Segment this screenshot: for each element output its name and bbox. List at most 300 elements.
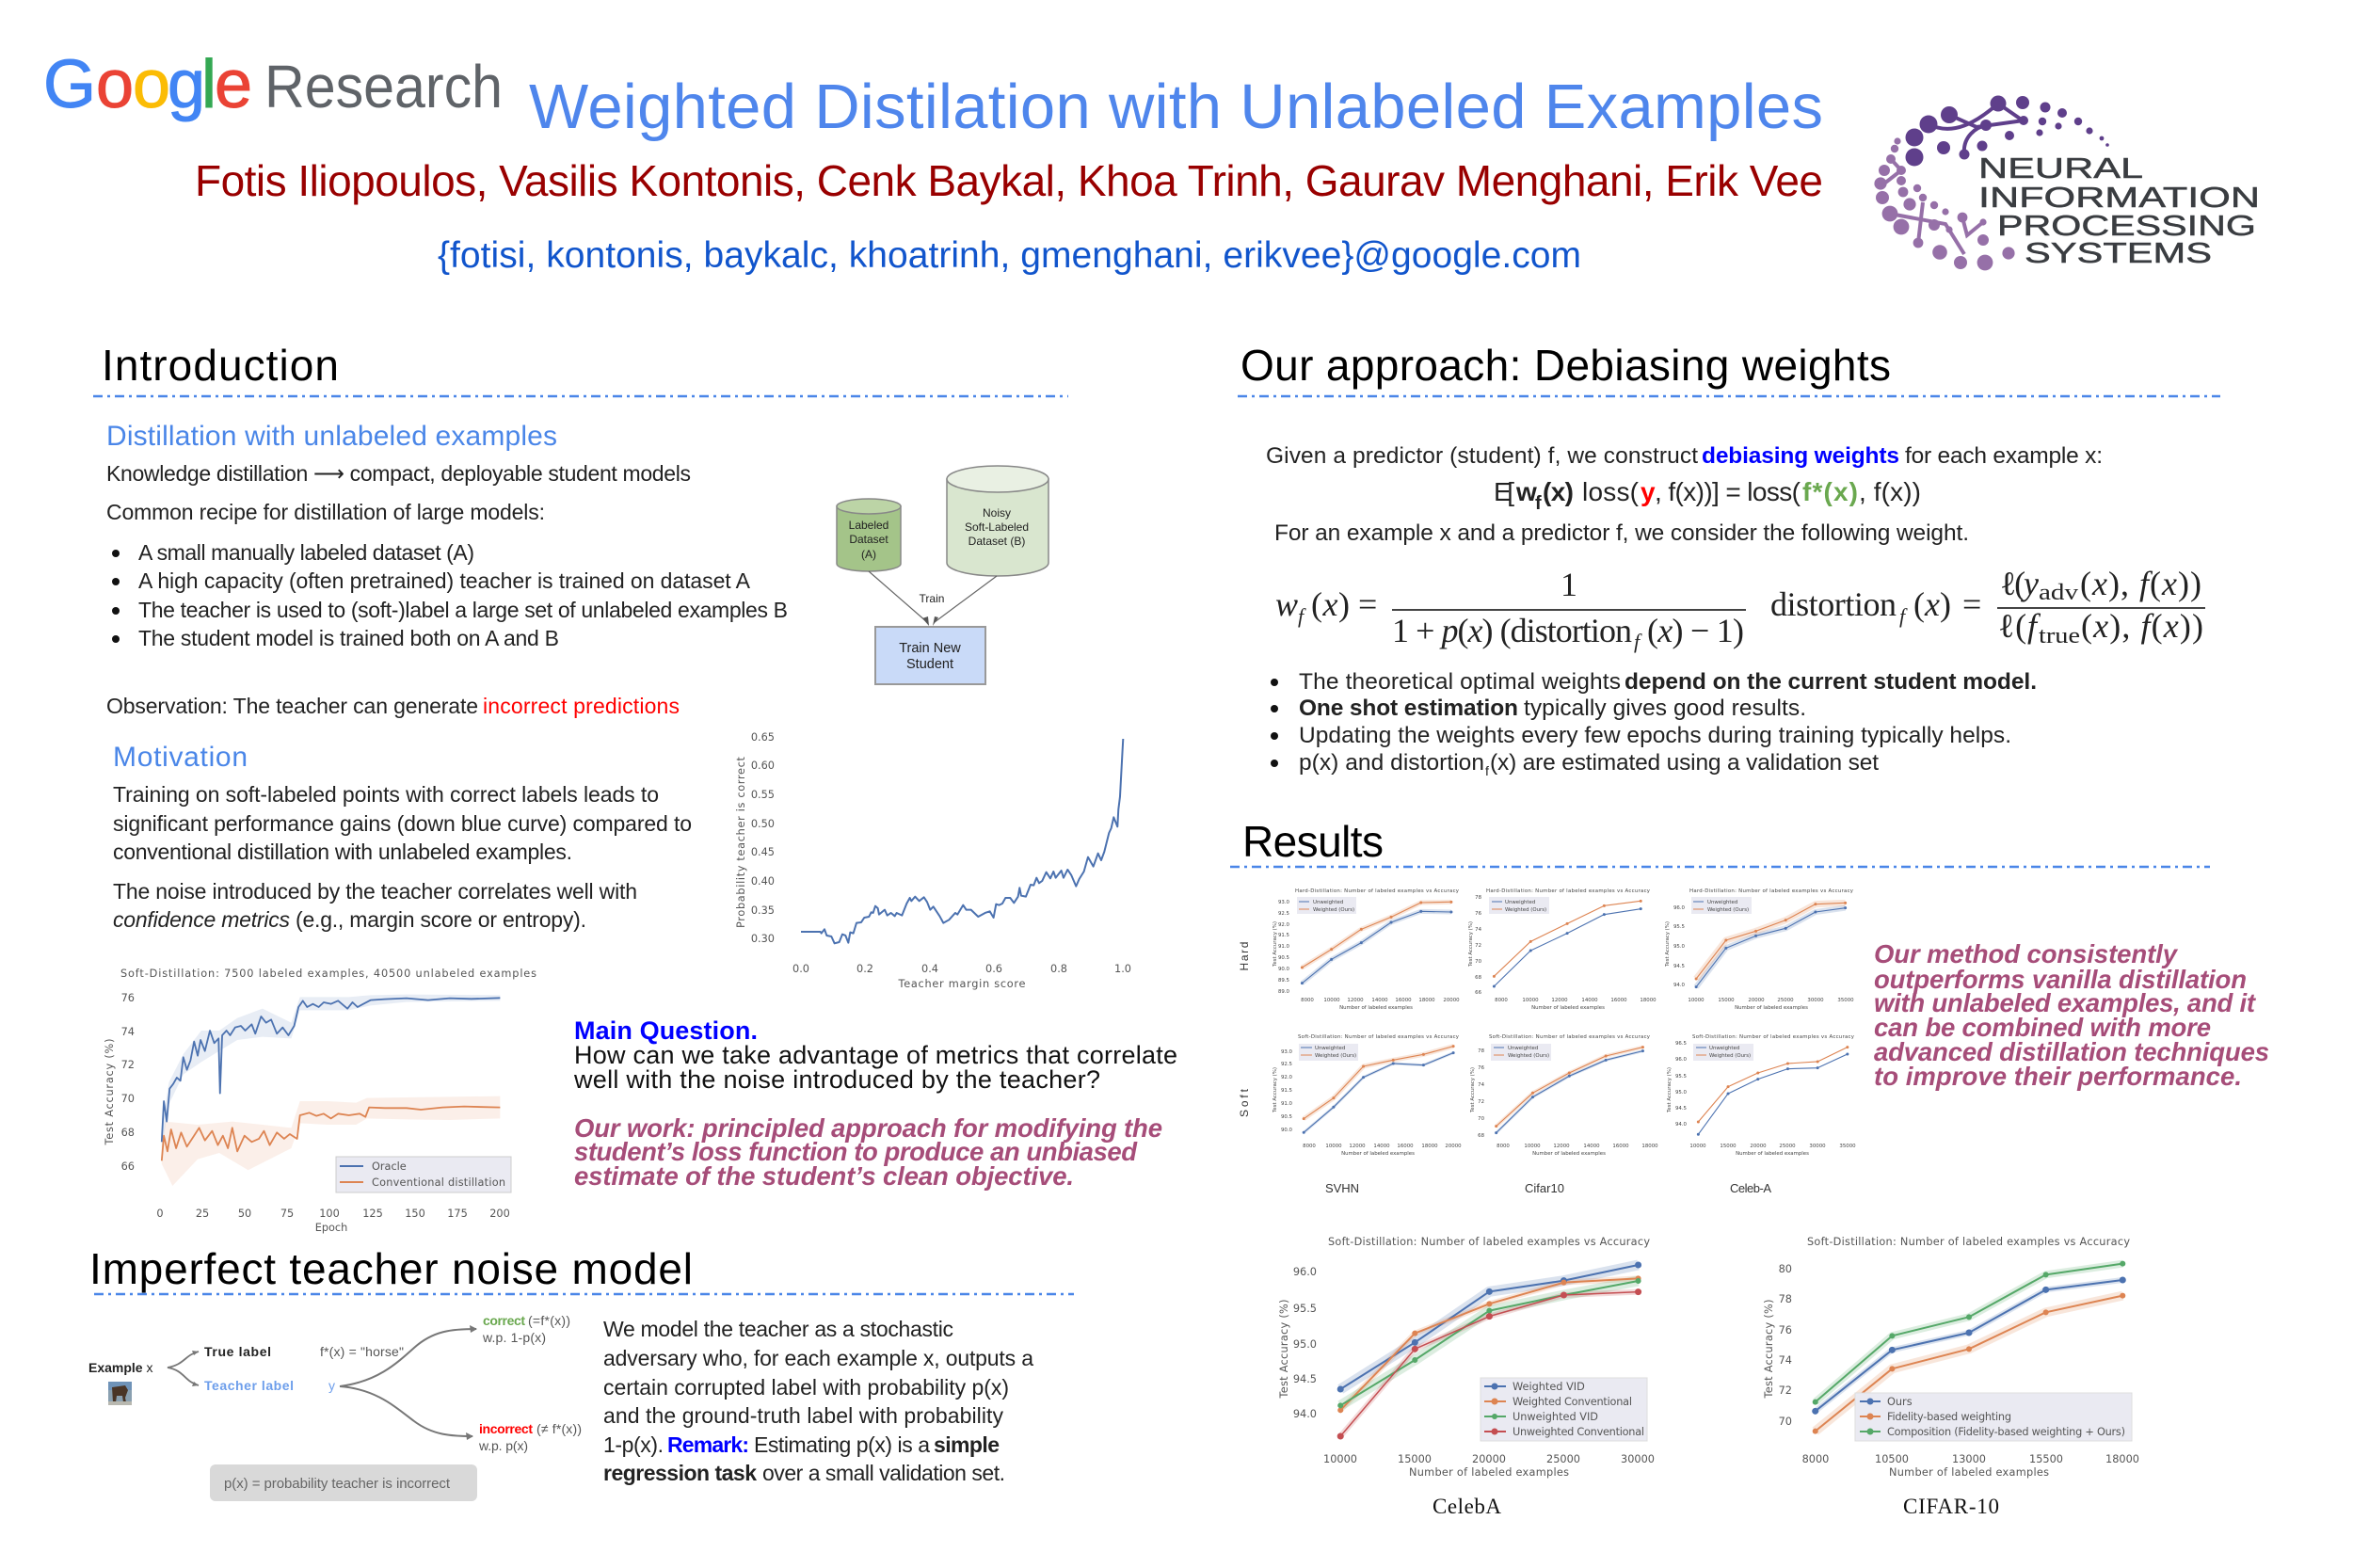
chart: soft distillation SVHN: 16000 (1397, 1144, 1414, 1149)
equation: expected weighted loss: f*(x) (1802, 477, 1858, 506)
equation: distortion formula: = (1962, 585, 1981, 623)
text: motivation body (113, 782, 692, 932)
heading: introduction: Introduction (102, 341, 339, 390)
chart: soft distillation Cifar10: Number of labeled examples (1532, 1151, 1606, 1157)
legend: Conventional distillation (372, 1176, 505, 1189)
chart: soft distillation SVHN: 14000 (1373, 1144, 1390, 1149)
chart: probability teacher is correct vs margin: 0.40 (751, 875, 775, 888)
chart: hard distillation Celeb-A: Test Accuracy (%) (1665, 921, 1671, 968)
legend: Weighted VID (1513, 1381, 1585, 1393)
chart: soft distillation Celeb-A: 25000 (1779, 1144, 1796, 1149)
chart: hard distillation Cifar10: Test Accuracy (%) (1468, 921, 1474, 968)
label: Celeb-A: Celeb-A (1730, 1181, 1771, 1195)
chart: soft distillation SVHN: 90.5 (1281, 1114, 1292, 1120)
chart: soft distillation Celeb-A: Test Accuracy (%) (1667, 1067, 1673, 1113)
chart: CIFAR-10 soft-distillation: 74 (1779, 1354, 1792, 1367)
chart: hard distillation Cifar10 (1468, 888, 1657, 1011)
emails: {fotisi, kontonis, baykalc, khoatrinh, gmenghani, erikvee}@google.com (438, 235, 1581, 276)
list: approach takeaways: p(x) and distortion (1299, 750, 1484, 776)
chart: CIFAR-10 soft-distillation: 76 (1779, 1324, 1792, 1336)
logo: Google Research: o (96, 47, 134, 122)
diagram: noise model tree: Teacher label (204, 1378, 294, 1393)
text: noise model body: simple (934, 1432, 1000, 1457)
equation: weight formula: 1 + p(x) (distortion (1392, 612, 1632, 649)
list: recipe: The student model is trained both on A and B (138, 626, 559, 650)
chart: hard distillation Cifar10: Unweighted (1505, 900, 1535, 905)
text: noise model body: adversary who, for each example x, outputs a (603, 1346, 1033, 1370)
chart: CelebA soft-distillation: 95.0 (1293, 1338, 1317, 1351)
diagram: teacher student data flow: Train (920, 592, 944, 605)
chart: CIFAR-10 soft-distillation: Number of labeled examples (1889, 1466, 2049, 1479)
equation: expected weighted loss: , f(x)) (1859, 477, 1921, 506)
chart: soft distillation SVHN: 18000 (1421, 1144, 1438, 1149)
chart: hard distillation SVHN: Hard-Distillation: Number of labeled examples vs Accuracy (1295, 888, 1460, 894)
chart: soft distillation Cifar10: 68 (1478, 1133, 1485, 1139)
chart: hard distillation SVHN: Weighted (Ours) (1313, 907, 1354, 913)
chart: CIFAR-10 soft-distillation: 10500 (1875, 1453, 1909, 1465)
diagram: noise model tree: (≠ f*(x)) (536, 1421, 582, 1436)
chart: hard distillation Cifar10: 74 (1475, 927, 1482, 933)
chart: soft distillation Cifar10: 74 (1478, 1082, 1485, 1088)
label: Cifar10: Cifar10 (1525, 1181, 1564, 1195)
chart: hard distillation SVHN: Unweighted (1313, 900, 1343, 905)
heading: imperfect teacher noise model: Imperfect teacher noise model (89, 1244, 693, 1293)
chart: hard distillation Cifar10: 14000 (1581, 998, 1598, 1003)
chart: soft distillation Celeb-A: 15000 (1720, 1144, 1737, 1149)
chart: soft-distillation oracle vs conventional: 74 (121, 1026, 135, 1038)
chart: soft distillation Cifar10: Unweighted (1508, 1046, 1538, 1051)
chart: soft-distillation oracle vs conventional: 125 (362, 1208, 383, 1220)
text: results takeaway: with unlabeled examples, and it (1874, 988, 2257, 1017)
chart: hard distillation Celeb-A: 25000 (1777, 998, 1794, 1003)
icon: horse image (108, 1382, 132, 1405)
chart: soft distillation SVHN: 90.0 (1281, 1128, 1293, 1133)
chart: hard distillation Celeb-A: Number of labeled examples (1735, 1005, 1808, 1011)
chart: soft distillation Cifar10: 78 (1478, 1048, 1485, 1054)
list: approach takeaways: (x) are estimated using a validation set (1490, 750, 1879, 776)
equation: expected weighted loss: loss( (1582, 477, 1640, 506)
chart: CIFAR-10 soft-distillation: 78 (1779, 1293, 1792, 1305)
chart: hard distillation Celeb-A: Hard-Distillation: Number of labeled examples vs Accuracy (1689, 888, 1854, 894)
chart: hard distillation Celeb-A: 30000 (1807, 998, 1824, 1003)
legend: Composition (Fidelity-based weighting + Ours) (1887, 1426, 2125, 1438)
diagram: teacher student data flow: (A) (861, 548, 876, 561)
chart: hard distillation Celeb-A: Weighted (Ours) (1707, 907, 1749, 913)
diagram: noise model tree: (=f*(x)) (528, 1313, 570, 1328)
chart: hard distillation SVHN: 12000 (1347, 998, 1364, 1003)
chart: hard distillation SVHN: 89.5 (1278, 978, 1289, 984)
chart: hard distillation Cifar10: 78 (1475, 895, 1482, 901)
equation: expected weighted loss: (x) (1543, 477, 1574, 506)
diagram: noise model tree: y (328, 1378, 335, 1393)
list: approach takeaways: Updating the weights every few epochs during training typically helps. (1299, 723, 2011, 748)
chart: hard distillation Cifar10: 72 (1475, 943, 1481, 949)
equation: weight formula (1275, 566, 1746, 653)
chart: soft distillation Celeb-A: 10000 (1689, 1144, 1706, 1149)
equation: weight formula: (x) − 1) (1647, 612, 1744, 649)
chart: soft distillation SVHN: 12000 (1349, 1144, 1366, 1149)
legend: Oracle (372, 1160, 407, 1173)
text: noise model body: Remark: (667, 1432, 749, 1457)
list: approach takeaways: One shot estimation (1299, 696, 1518, 721)
equation: expected weighted loss: y (1641, 477, 1656, 506)
text: noise model body: 1-p(x). (603, 1432, 664, 1457)
text: our work: estimate of the student’s clean objective. (574, 1161, 1074, 1191)
logo: Google Research: l (201, 47, 216, 122)
label: CIFAR-10: CIFAR-10 (1903, 1495, 1999, 1518)
chart: soft distillation Celeb-A: Weighted (Ours) (1709, 1053, 1751, 1059)
text: results takeaway: outperforms vanilla distillation (1874, 965, 2247, 994)
chart: soft distillation SVHN: 93.0 (1281, 1049, 1293, 1055)
chart: soft distillation Cifar10: 18000 (1641, 1144, 1658, 1149)
equation: distortion formula: distortion (1770, 585, 1897, 623)
text: results takeaway: can be combined with more (1874, 1013, 2211, 1042)
equation: distortion formula: true (2039, 624, 2080, 648)
legend (336, 1157, 511, 1192)
chart: soft distillation Cifar10: 14000 (1583, 1144, 1600, 1149)
chart: CelebA soft-distillation: 25000 (1546, 1453, 1580, 1465)
chart: soft-distillation oracle vs conventional: 200 (489, 1208, 510, 1220)
chart: soft distillation Celeb-A: Number of labeled examples (1736, 1151, 1809, 1157)
list: recipe: A small manually labeled dataset (A) (138, 540, 474, 565)
text: motivation body: Training on soft-labeled points with correct labels leads to (113, 782, 659, 807)
text: results takeaway (1874, 939, 2269, 1091)
heading: our approach: Our approach: Debiasing weights (1241, 341, 1891, 390)
text: noise model body: certain corrupted label with probability p(x) (603, 1375, 1009, 1400)
text: main question: How can we take advantage of metrics that correlate (574, 1041, 1177, 1069)
list: approach takeaways: The theoretical optimal weights (1299, 669, 1621, 695)
chart: hard distillation SVHN: 91.0 (1278, 944, 1290, 950)
diagram: teacher student data flow: Dataset (849, 533, 888, 546)
label: CelebA: CelebA (1433, 1495, 1501, 1518)
chart: probability teacher is correct vs margin: 1.0 (1114, 963, 1131, 975)
chart: hard distillation Cifar10: 16000 (1610, 998, 1627, 1003)
chart: CIFAR-10 soft-distillation: 8000 (1802, 1453, 1829, 1465)
label: soft row: Soft (1238, 1088, 1251, 1117)
chart: hard distillation Cifar10: 70 (1475, 959, 1482, 965)
text: noise model body: and the ground-truth label with probability (603, 1403, 1003, 1428)
chart: soft-distillation oracle vs conventional: Epoch (315, 1222, 347, 1234)
equation: distortion formula (1770, 565, 2205, 648)
equation: weight formula: w (1275, 585, 1298, 623)
title: Weighted Distilation with Unlabeled Examples (529, 72, 1823, 142)
label: SVHN: SVHN (1325, 1181, 1359, 1195)
text: results takeaway: Our method consistently (1874, 939, 2179, 968)
chart: soft distillation SVHN: 92.0 (1281, 1075, 1293, 1080)
chart: probability teacher is correct vs margin (735, 731, 1131, 990)
text: given a predictor: for each example x: (1905, 443, 2103, 469)
chart: soft distillation Celeb-A: 95.5 (1675, 1074, 1687, 1080)
chart: hard distillation SVHN: 90.5 (1278, 955, 1289, 961)
chart: hard distillation SVHN: 93.0 (1278, 900, 1290, 905)
diagram: noise model tree: correct (483, 1313, 525, 1328)
chart: CelebA soft-distillation: 30000 (1621, 1453, 1655, 1465)
chart: soft distillation Cifar10: 70 (1478, 1116, 1485, 1122)
chart: soft distillation SVHN: Number of labeled examples (1341, 1151, 1415, 1157)
chart: hard distillation Cifar10: 76 (1475, 911, 1482, 917)
chart: soft distillation Cifar10: 10000 (1524, 1144, 1541, 1149)
text: our work (574, 1113, 1162, 1191)
chart: hard distillation Celeb-A: Unweighted (1707, 900, 1737, 905)
chart: soft-distillation oracle vs conventional: 25 (196, 1208, 209, 1220)
equation: distortion formula: ℓ(f (1998, 607, 2041, 645)
chart: hard distillation SVHN: 18000 (1418, 998, 1435, 1003)
panel: introduction (93, 341, 1177, 1234)
logo: Google Research: e (215, 47, 252, 122)
chart: CIFAR-10 soft-distillation: 80 (1779, 1263, 1792, 1275)
diagram: teacher student data flow: Soft-Labeled (965, 520, 1029, 534)
chart: hard distillation SVHN: 91.5 (1278, 933, 1289, 938)
chart: soft distillation Celeb-A: 96.0 (1675, 1057, 1688, 1063)
list: recipe: The teacher is used to (soft-)label a large set of unlabeled examples B (138, 598, 788, 622)
chart: probability teacher is correct vs margin: 0.35 (751, 904, 775, 917)
text: main question: well with the noise introduced by the teacher? (573, 1065, 1100, 1094)
equation: distortion formula: (x), f(x)) (2081, 607, 2203, 645)
chart: soft distillation Celeb-A: 94.5 (1675, 1106, 1687, 1112)
legend: Unweighted Conventional (1513, 1426, 1644, 1438)
equation: distortion formula: ℓ(y (2000, 565, 2039, 602)
equation: expected weighted loss: w (1515, 477, 1537, 506)
list: recipe: A high capacity (often pretrained) teacher is trained on dataset A (138, 568, 751, 593)
chart: soft distillation Celeb-A: 96.5 (1675, 1041, 1687, 1047)
chart: soft distillation Celeb-A: 35000 (1839, 1144, 1856, 1149)
logo: Neural Information Processing Systems (1874, 96, 2260, 270)
chart: hard distillation Cifar10: Hard-Distillation: Number of labeled examples vs Accuracy (1486, 888, 1651, 894)
chart: hard distillation Cifar10: Weighted (Ours) (1505, 907, 1546, 913)
chart: CelebA soft-distillation: Soft-Distillation: Number of labeled examples vs Accuracy (1328, 1236, 1650, 1248)
legend (1855, 1393, 2132, 1441)
chart: soft-distillation oracle vs conventional: Test Accuracy (%) (104, 1039, 116, 1146)
chart: hard distillation Celeb-A: 94.0 (1673, 983, 1686, 988)
list: approach takeaways: f (1485, 763, 1489, 778)
chart: soft distillation SVHN: 10000 (1325, 1144, 1342, 1149)
chart: probability teacher is correct vs margin: 0.65 (751, 731, 775, 744)
chart: soft distillation Celeb-A: Soft-Distillation: Number of labeled examples vs Accuracy (1692, 1034, 1855, 1040)
equation: weight formula: 1 (1561, 566, 1577, 603)
chart: soft distillation Celeb-A: 20000 (1750, 1144, 1767, 1149)
text: motivation body: confidence metrics (e.g., margin score or entropy). (113, 907, 586, 932)
text: noise model body: Estimating p(x) is a (754, 1432, 930, 1457)
text: given a predictor: Given a predictor (student) f, we construct (1266, 443, 1698, 469)
chart: probability teacher is correct vs margin: 0.0 (792, 963, 809, 975)
equation: expected weighted loss: E[ (1494, 477, 1514, 506)
chart: hard distillation SVHN: 14000 (1371, 998, 1388, 1003)
equation: distortion formula: (x) (1913, 585, 1951, 623)
chart: CelebA soft-distillation: 96.0 (1293, 1266, 1317, 1278)
chart: soft distillation SVHN: Unweighted (1315, 1046, 1345, 1051)
logo: Google Research: G (43, 47, 96, 122)
chart: soft distillation Cifar10: Weighted (Ours) (1508, 1053, 1549, 1059)
chart: soft-distillation oracle vs conventional: 150 (405, 1208, 425, 1220)
logo: Neural Information Processing Systems: NEURAL (1978, 152, 2143, 184)
chart: hard distillation SVHN (1273, 888, 1460, 1011)
label: hard row: Hard (1238, 941, 1251, 971)
chart: CelebA soft-distillation: 20000 (1472, 1453, 1506, 1465)
chart: CelebA soft-distillation (1278, 1236, 1655, 1479)
chart: CelebA soft-distillation: 94.0 (1293, 1408, 1317, 1420)
chart: hard distillation Celeb-A: 96.0 (1673, 905, 1686, 911)
chart: soft-distillation oracle vs conventional: 66 (121, 1160, 135, 1173)
chart: probability teacher is correct vs margin: Teacher margin score (898, 978, 1026, 990)
chart: CIFAR-10 soft-distillation: 15500 (2029, 1453, 2063, 1465)
chart: hard distillation Cifar10: 8000 (1495, 998, 1508, 1003)
chart: soft-distillation oracle vs conventional (104, 968, 536, 1234)
text: given a predictor (1266, 443, 2103, 469)
chart: hard distillation SVHN: 16000 (1395, 998, 1412, 1003)
chart: soft distillation Cifar10: 72 (1478, 1099, 1484, 1105)
diagram: noise model tree: True label (204, 1344, 271, 1359)
logo: Google Research: g (168, 47, 205, 122)
subheading: distillation: Distillation with unlabeled examples (106, 421, 557, 452)
diagram: teacher student data flow: Dataset (B) (968, 535, 1025, 548)
chart: probability teacher is correct vs margin: 0.4 (921, 963, 938, 975)
chart: soft-distillation oracle vs conventional: 100 (319, 1208, 340, 1220)
text: results takeaway: advanced distillation techniques (1874, 1037, 2269, 1066)
chart: CelebA soft-distillation: Test Accuracy (%) (1278, 1299, 1290, 1399)
chart: soft distillation Celeb-A: 95.0 (1675, 1090, 1688, 1096)
chart: soft distillation Cifar10 (1470, 1034, 1658, 1157)
list: approach takeaways: typically gives good results. (1524, 696, 1806, 721)
equation: weight formula: f (1634, 630, 1642, 653)
chart: CelebA soft-distillation: 10000 (1323, 1453, 1357, 1465)
chart: soft distillation SVHN (1273, 1034, 1462, 1157)
text: motivation body: conventional distillation with unlabeled examples. (113, 840, 572, 864)
chart: soft-distillation oracle vs conventional: 175 (447, 1208, 468, 1220)
chart: probability teacher is correct vs margin: 0.50 (751, 818, 775, 830)
chart: hard distillation SVHN: 92.0 (1278, 922, 1290, 928)
chart: soft distillation SVHN: 91.5 (1281, 1088, 1292, 1094)
chart: hard distillation Celeb-A (1665, 888, 1854, 1011)
text: main question (573, 1016, 1177, 1094)
legend: Fidelity-based weighting (1887, 1411, 2011, 1423)
equation: weight formula: (x) (1311, 585, 1350, 623)
diagram: noise model tree: w.p. p(x) (478, 1438, 528, 1453)
authors: Fotis Iliopoulos, Vasilis Kontonis, Cenk Baykal, Khoa Trinh, Gaurav Menghani, Erik Vee (195, 156, 1823, 205)
diagram: noise model tree (88, 1313, 582, 1501)
chart: hard distillation SVHN: 8000 (1301, 998, 1314, 1003)
text: motivation body: significant performance gains (down blue curve) compared to (113, 811, 692, 836)
text: our work: student’s loss function to produce an unbiased (574, 1137, 1138, 1166)
text: motivation body: The noise introduced by the teacher correlates well with (113, 879, 637, 904)
chart: probability teacher is correct vs margin: 0.30 (751, 933, 775, 945)
diagram: teacher student data flow (837, 466, 1048, 684)
logo: Neural Information Processing Systems: PROCESSING (1997, 209, 2256, 242)
logo: Google Research: Research (264, 53, 503, 120)
panel: imperfect teacher noise model (88, 1244, 1074, 1501)
text: observation (106, 694, 680, 718)
chart: CIFAR-10 soft-distillation (1763, 1236, 2139, 1479)
text: noise model body: regression task (603, 1461, 757, 1485)
chart: soft-distillation oracle vs conventional: 50 (238, 1208, 251, 1220)
chart: CelebA soft-distillation: Number of labeled examples (1409, 1466, 1569, 1479)
chart: soft distillation SVHN: Test Accuracy (%) (1273, 1067, 1278, 1113)
chart: probability teacher is correct vs margin: 0.60 (751, 760, 775, 772)
chart: hard distillation SVHN: Number of labeled examples (1339, 1005, 1413, 1011)
chart: soft distillation Cifar10: 12000 (1553, 1144, 1570, 1149)
callout: p(x) definition (210, 1464, 477, 1501)
chart: hard distillation Celeb-A: 20000 (1748, 998, 1765, 1003)
text: observation: Observation: The teacher can generate (106, 694, 478, 718)
equation: distortion formula: adv (2039, 581, 2078, 605)
chart: soft distillation SVHN: 92.5 (1281, 1062, 1292, 1067)
logo: Neural Information Processing Systems: INFORMATION (1978, 181, 2260, 214)
chart: probability teacher is correct vs margin: 0.6 (985, 963, 1002, 975)
equation: expected weighted loss: , f(x))] = loss( (1655, 477, 1801, 506)
chart: soft distillation Celeb-A: 30000 (1809, 1144, 1826, 1149)
chart: hard distillation Cifar10: 68 (1475, 975, 1482, 981)
chart: hard distillation Cifar10: 12000 (1551, 998, 1568, 1003)
chart: soft distillation Cifar10: 76 (1478, 1065, 1485, 1071)
chart: soft distillation SVHN: Soft-Distillation: Number of labeled examples vs Accuracy (1298, 1034, 1460, 1040)
chart: hard distillation SVHN: 20000 (1443, 998, 1460, 1003)
legend: Ours (1887, 1396, 1913, 1408)
chart: soft-distillation oracle vs conventional: 75 (280, 1208, 294, 1220)
logo: Google Research: o (133, 47, 170, 122)
equation: expected weighted loss: f (1535, 493, 1542, 514)
callout: p(x) definition: p(x) = probability teacher is incorrect (224, 1476, 451, 1492)
chart: CelebA soft-distillation: 94.5 (1293, 1373, 1317, 1385)
chart: hard distillation Cifar10: 10000 (1522, 998, 1539, 1003)
chart: hard distillation Celeb-A: 10000 (1688, 998, 1705, 1003)
chart: CIFAR-10 soft-distillation: Soft-Distillation: Number of labeled examples vs Accuracy (1807, 1236, 2130, 1248)
chart: CIFAR-10 soft-distillation: Test Accuracy (%) (1763, 1299, 1775, 1399)
chart: soft-distillation oracle vs conventional: Soft-Distillation: 7500 labeled examples, 40500 unlabeled examples (120, 968, 536, 980)
legend: Unweighted VID (1513, 1411, 1598, 1423)
panel: our approach (1238, 341, 2220, 778)
legend: Weighted Conventional (1513, 1396, 1632, 1408)
chart: hard distillation Cifar10: Number of labeled examples (1531, 1005, 1605, 1011)
chart: soft distillation Cifar10: 16000 (1612, 1144, 1629, 1149)
chart: soft distillation SVHN: 91.0 (1281, 1101, 1293, 1107)
heading: results: Results (1242, 817, 1384, 866)
chart: CIFAR-10 soft-distillation: 70 (1779, 1416, 1792, 1428)
text: our work: Our work: principled approach for modifying the (574, 1113, 1162, 1143)
text: noise model body (603, 1317, 1033, 1485)
text: given a predictor: debiasing weights (1702, 443, 1899, 469)
diagram: noise model tree: Example x (88, 1360, 152, 1375)
chart: soft distillation SVHN: 20000 (1445, 1144, 1462, 1149)
text: knowledge distillation: Knowledge distillation ⟶ compact, deployable student models (106, 461, 691, 486)
legend (1481, 1378, 1647, 1441)
logo: Google Research (43, 47, 503, 122)
chart: hard distillation Celeb-A: 94.5 (1673, 964, 1685, 969)
chart: hard distillation Celeb-A: 15000 (1718, 998, 1735, 1003)
chart: hard distillation SVHN: 92.5 (1278, 911, 1289, 917)
chart: probability teacher is correct vs margin: 0.2 (856, 963, 873, 975)
list: recipe (112, 540, 788, 650)
chart: probability teacher is correct vs margin: 0.55 (751, 789, 775, 801)
list: approach takeaways (1271, 669, 2037, 778)
text: results takeaway: to improve their performance. (1874, 1062, 2242, 1091)
chart: soft-distillation oracle vs conventional: 0 (156, 1208, 164, 1220)
chart: hard distillation SVHN: 90.0 (1278, 967, 1290, 972)
text: common recipe: Common recipe for distillation of large models: (106, 500, 545, 524)
text: noise model body: over a small validation set. (762, 1461, 1005, 1485)
chart: soft distillation Celeb-A: Unweighted (1709, 1046, 1739, 1051)
chart: soft-distillation oracle vs conventional: 72 (121, 1059, 135, 1071)
chart: soft distillation Cifar10: Test Accuracy (%) (1470, 1067, 1476, 1113)
diagram: noise model tree: w.p. 1-p(x) (482, 1330, 546, 1345)
equation: distortion formula: f (1899, 604, 1908, 628)
chart: hard distillation Celeb-A: 95.0 (1673, 944, 1686, 950)
panel: results (1230, 817, 2269, 1518)
diagram: teacher student data flow: Labeled (849, 519, 888, 532)
chart: CelebA soft-distillation: 95.5 (1293, 1303, 1317, 1315)
logo: Neural Information Processing Systems: SYSTEMS (2025, 236, 2212, 269)
chart: CIFAR-10 soft-distillation: 18000 (2105, 1453, 2139, 1465)
chart: CIFAR-10 soft-distillation: 13000 (1952, 1453, 1986, 1465)
chart: hard distillation Cifar10: 66 (1475, 990, 1482, 996)
